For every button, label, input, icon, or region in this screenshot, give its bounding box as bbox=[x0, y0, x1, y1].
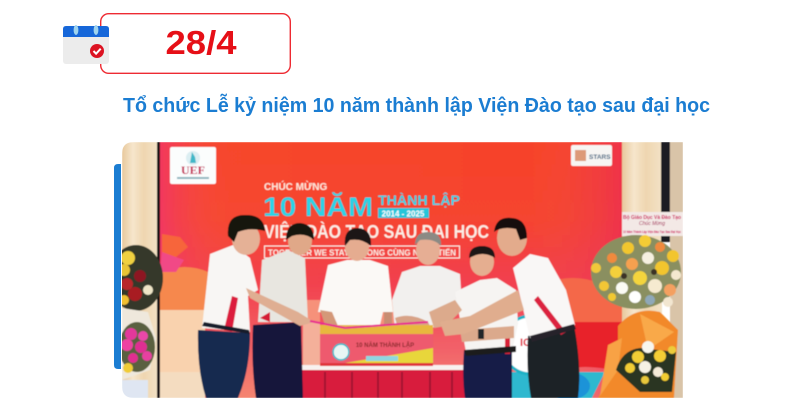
screen heading: TOGETHER WE STAY STRONG CÙNG NHAU TIẾN bbox=[268, 246, 456, 258]
right curtain bbox=[622, 142, 683, 398]
date text: 28/4 bbox=[166, 24, 237, 61]
screen heading: VIỆN ĐÀO TẠO SAU ĐẠI HỌC bbox=[264, 221, 489, 242]
table with red cloth bbox=[285, 365, 467, 398]
LED screen bbox=[160, 142, 622, 400]
LED screen: IGI bbox=[520, 337, 535, 349]
date box bbox=[101, 14, 290, 73]
UEF logo bbox=[170, 147, 216, 184]
right flowers and ribbon bbox=[591, 235, 681, 398]
title: Tổ chức Lễ kỷ niệm 10 năm thành lập Viện Đào tạo sau đại học bbox=[123, 93, 710, 117]
banner on flower stand bbox=[622, 212, 683, 236]
banner on flower stand: Bộ Giáo Dục Và Đào Tạo bbox=[623, 215, 681, 221]
screen heading: 2014 - 2025 bbox=[382, 210, 425, 218]
left curtain bbox=[122, 142, 158, 398]
screen heading: CHÚC MỪNG bbox=[264, 180, 328, 193]
banner on flower stand: 10 Năm Thành Lập Viện Đào Tạo Sau Đại Học bbox=[623, 229, 682, 234]
person 2 bbox=[252, 223, 314, 398]
screen heading: 10 NĂM bbox=[263, 191, 373, 222]
photo bbox=[109, 142, 683, 400]
banner on flower stand: Chúc Mừng bbox=[639, 221, 665, 227]
person 6 bbox=[440, 218, 579, 398]
person 1 bbox=[198, 215, 314, 398]
icon: calendar bbox=[63, 25, 109, 64]
left flowers bbox=[122, 244, 164, 398]
cake bbox=[310, 321, 433, 366]
infographic canvas bbox=[63, 13, 710, 398]
sponsor logo: STARS bbox=[589, 154, 611, 161]
cake: 10 NĂM THÀNH LẬP bbox=[356, 342, 414, 349]
round event badge bbox=[511, 314, 530, 375]
person 4 bbox=[392, 232, 462, 330]
accent bar bbox=[114, 164, 121, 369]
screen heading bbox=[263, 180, 489, 258]
UEF logo: UEF bbox=[181, 163, 205, 177]
person 3 bbox=[318, 228, 393, 328]
screen heading: THÀNH LẬP bbox=[378, 191, 460, 208]
sponsor logo bbox=[571, 145, 612, 166]
person 5 bbox=[429, 246, 518, 398]
